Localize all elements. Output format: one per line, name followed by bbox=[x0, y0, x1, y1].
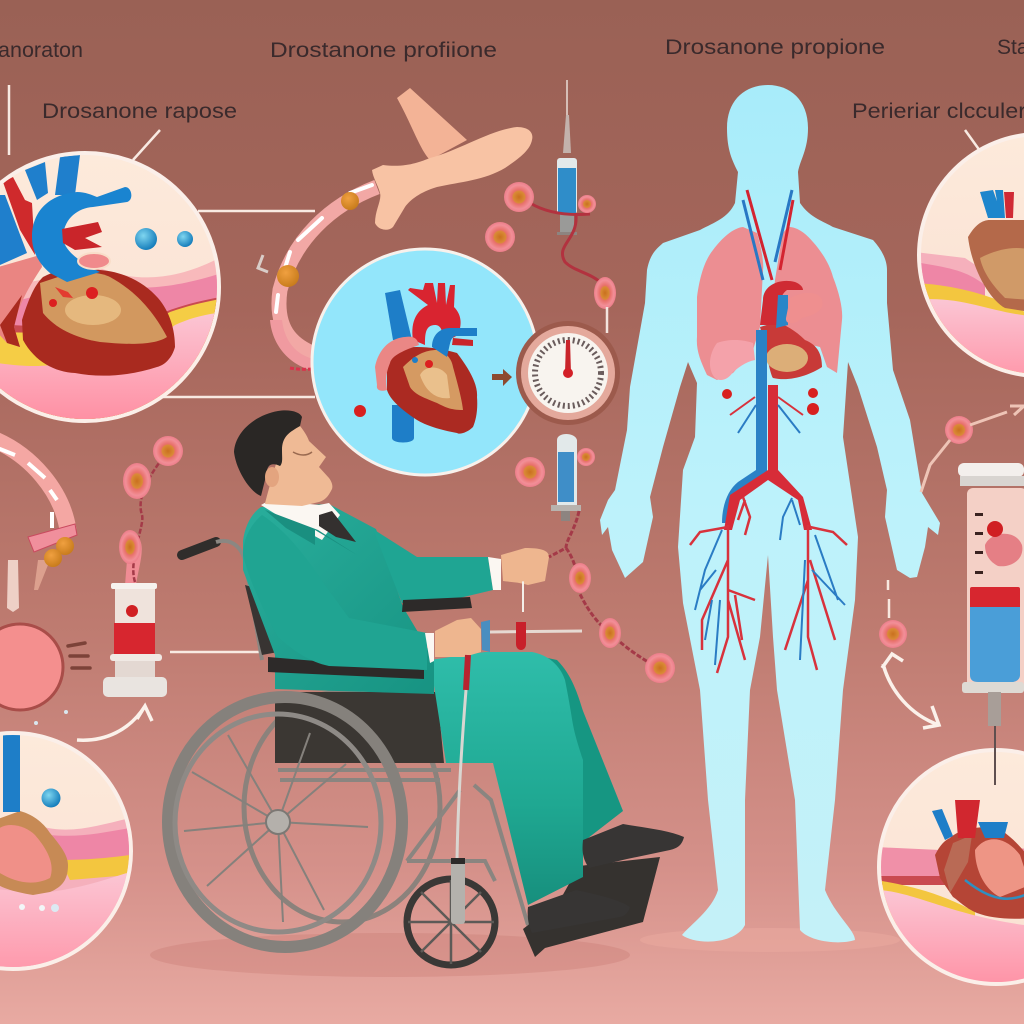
leg veins bbox=[695, 498, 845, 665]
superior vena cava bbox=[385, 290, 412, 340]
leg arteries bbox=[690, 497, 847, 673]
seat cushion bbox=[268, 657, 424, 679]
icon: small left vial with arrow bbox=[77, 436, 183, 740]
wheelchair seat panel bbox=[275, 692, 444, 763]
icon: caster and pole bbox=[407, 655, 495, 965]
aortic arch bbox=[408, 283, 461, 345]
aorta bbox=[32, 187, 131, 282]
wheelchair footrest bbox=[523, 857, 660, 957]
lower right heart bbox=[935, 827, 1024, 919]
icon: main wheel bbox=[168, 697, 402, 947]
left heart wall bbox=[22, 268, 175, 376]
icon: hand-held syringe and test tube bbox=[481, 559, 582, 652]
icon: left tube and tablet bbox=[0, 440, 90, 725]
tie bbox=[319, 511, 356, 542]
label: drosanone rapose: Drosanone rapose bbox=[42, 100, 237, 123]
jacket bbox=[243, 504, 434, 694]
icon: wheelchair rear bbox=[182, 541, 528, 925]
heart body bbox=[387, 347, 477, 434]
connector lines bbox=[9, 85, 988, 652]
arrow: heart to gauge bbox=[492, 369, 512, 386]
aorta and vena cava bbox=[722, 330, 767, 523]
lower left heart bbox=[0, 811, 68, 895]
body silhouette bbox=[600, 85, 940, 952]
label: perieriar clcculer: Perieriar clcculer bbox=[852, 100, 1024, 123]
patient legs bbox=[430, 652, 623, 905]
panel: central blue heart circle bbox=[312, 249, 538, 475]
inferior vena cava bbox=[392, 405, 414, 442]
armrest bbox=[402, 597, 472, 612]
left atrium bbox=[0, 255, 42, 347]
icon: arm and pink tube bbox=[258, 88, 532, 372]
heading: drosanone propione: Drosanone propione bbox=[665, 36, 885, 59]
patient hand over cable bbox=[505, 554, 545, 581]
panel: lower right circle bbox=[875, 750, 1024, 1000]
floor shadow bbox=[150, 933, 630, 977]
far arm bbox=[373, 529, 493, 605]
left atrium bbox=[375, 337, 419, 391]
ear bbox=[265, 467, 279, 487]
panel: lower left circle bbox=[0, 730, 131, 1000]
vessels bbox=[0, 155, 80, 265]
hair bbox=[234, 410, 302, 496]
lapel bbox=[265, 510, 357, 555]
icon: upper syringe with chain bbox=[485, 80, 616, 333]
right heart bbox=[968, 220, 1024, 312]
pulmonary artery bbox=[432, 328, 477, 357]
left heart inner bbox=[40, 272, 167, 344]
heading: left fragment: anoraton bbox=[0, 39, 83, 62]
collar and shirt bbox=[261, 500, 340, 540]
head bbox=[265, 426, 332, 506]
lungs bbox=[697, 227, 842, 380]
near arm bbox=[243, 515, 427, 670]
icon: large right syringe bbox=[958, 463, 1024, 785]
heading: drostanone profiione: Drostanone profiione bbox=[270, 39, 497, 62]
icon: lower syringe with chain bbox=[515, 434, 675, 683]
liver bbox=[710, 340, 755, 380]
closed eye bbox=[293, 452, 312, 455]
icon: gauge bbox=[516, 321, 620, 425]
patient shoes bbox=[528, 824, 684, 933]
panel: left heart circle bbox=[0, 153, 225, 430]
patient upper body bbox=[234, 410, 549, 694]
icon: right nodes and arrows bbox=[879, 406, 1024, 728]
heart and vessels in chest bbox=[743, 190, 823, 379]
panel: right heart circle bbox=[915, 134, 1024, 400]
heart inner bbox=[403, 350, 463, 410]
abdominal branches bbox=[730, 397, 803, 433]
